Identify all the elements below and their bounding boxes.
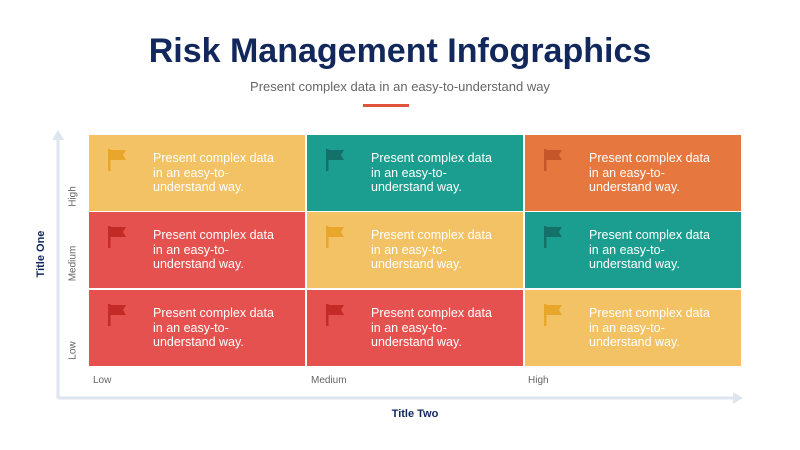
cell low-medium: Present complex data: [371, 306, 492, 320]
cell low-medium: understand way.: [371, 335, 462, 349]
cell low-low: Present complex data: [153, 306, 274, 320]
cell medium-low: understand way.: [153, 257, 244, 271]
cell low-low: in an easy-to-: [153, 320, 229, 334]
x labels: Low: [93, 375, 111, 386]
cell medium-high: understand way.: [589, 257, 680, 271]
cell high-medium: [307, 135, 523, 211]
cell high-low: Present complex data: [153, 151, 274, 165]
y axis title: Title One: [35, 231, 47, 277]
cell medium-medium: understand way.: [371, 257, 462, 271]
y labels: High: [68, 186, 78, 207]
cell high-high: [525, 135, 741, 211]
cell low-medium: [307, 290, 523, 366]
subtitle: Present complex data in an easy-to-understand way: [250, 79, 550, 94]
cell low-high: Present complex data: [589, 306, 710, 320]
cell medium-low: Present complex data: [153, 228, 274, 242]
divider accent: [363, 104, 409, 107]
title: Risk Management Infographics: [149, 32, 651, 70]
matrix grid: [89, 135, 741, 366]
cell high-medium: Present complex data: [371, 151, 492, 165]
cell medium-high: in an easy-to-: [589, 242, 665, 256]
cell high-low: [89, 135, 305, 211]
cell medium-high: [525, 212, 741, 288]
cell medium-medium: [307, 212, 523, 288]
cell low-high: in an easy-to-: [589, 320, 665, 334]
cell low-low: understand way.: [153, 335, 244, 349]
text: Medium: [311, 375, 347, 386]
cell medium-medium: in an easy-to-: [371, 242, 447, 256]
cell medium-low: [89, 212, 305, 288]
cell low-low: [89, 290, 305, 366]
text: Medium: [68, 246, 78, 281]
text: Low: [68, 341, 78, 360]
cell low-high: understand way.: [589, 335, 680, 349]
x axis title: Title Two: [392, 408, 438, 420]
cell high-high: understand way.: [589, 180, 680, 194]
cell medium-low: in an easy-to-: [153, 242, 229, 256]
cell medium-high: Present complex data: [589, 228, 710, 242]
text: High: [528, 375, 549, 386]
cell low-medium: in an easy-to-: [371, 320, 447, 334]
cell low-high: [525, 290, 741, 366]
cell high-medium: understand way.: [371, 180, 462, 194]
cell high-high: Present complex data: [589, 151, 710, 165]
cell high-medium: in an easy-to-: [371, 166, 447, 180]
cell high-low: in an easy-to-: [153, 166, 229, 180]
cell high-low: understand way.: [153, 180, 244, 194]
cell medium-medium: Present complex data: [371, 228, 492, 242]
cell high-high: in an easy-to-: [589, 166, 665, 180]
